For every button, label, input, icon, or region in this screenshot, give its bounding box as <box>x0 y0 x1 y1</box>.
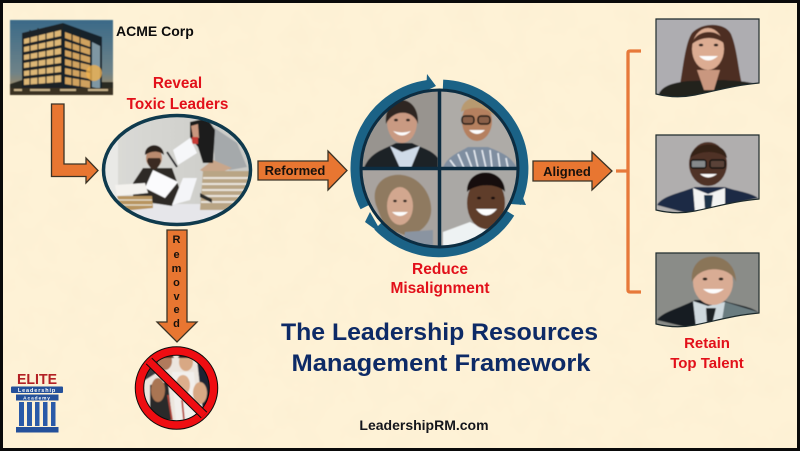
icon: prohibited toxic leaders <box>140 350 214 426</box>
photo: top talent man in suit <box>656 253 759 329</box>
woman <box>213 127 247 170</box>
ring arrows <box>356 74 526 252</box>
logo: ELITE Leadership Academy: Leadership <box>18 388 56 394</box>
arrow: Removed: e <box>173 304 180 316</box>
arrow: Removed: o <box>173 277 180 289</box>
label: Reveal Toxic Leaders: Reveal <box>153 75 202 92</box>
man bottom-right <box>442 222 486 246</box>
bracket <box>616 51 641 292</box>
photo: toxic leader oval <box>100 112 255 228</box>
arrow: Removed: m <box>172 263 182 275</box>
icon: ACME office building photo <box>10 20 113 95</box>
arrow: Reformed: Reformed <box>265 163 325 178</box>
left stack <box>115 183 148 196</box>
arrow: Aligned: Aligned <box>543 164 591 179</box>
logo: ELITE Leadership Academy <box>11 372 63 432</box>
label: Reduce Misalignment: Misalignment <box>390 280 490 297</box>
website: LeadershipRM.com <box>359 417 489 433</box>
right stack <box>200 171 250 210</box>
title: The Leadership Resources <box>281 319 598 346</box>
photo quadrants <box>360 88 521 250</box>
woman bottom-left <box>375 175 431 237</box>
photo: top talent man with glasses <box>656 135 759 215</box>
arrow: Reformed <box>258 151 347 190</box>
quadrant dividers <box>361 90 518 247</box>
arrow: Removed: v <box>173 291 180 303</box>
label: Retain Top Talent: Top Talent <box>670 355 744 372</box>
woman top-right <box>443 147 517 168</box>
arrow: Removed <box>157 230 197 342</box>
label: Retain Top Talent: Retain <box>684 335 730 352</box>
title: Management Framework <box>292 350 591 377</box>
label: ACME Corp: ACME Corp <box>116 23 194 39</box>
man <box>133 168 180 206</box>
man top-left <box>364 143 438 168</box>
arrow: building to toxic leaders <box>52 104 98 183</box>
label: Reveal Toxic Leaders: Toxic Leaders <box>127 96 228 113</box>
label: Reduce Misalignment: Reduce <box>412 261 468 278</box>
reduce misalignment circle <box>356 74 526 252</box>
arrow: Removed: e <box>173 249 180 261</box>
flying papers <box>173 138 197 165</box>
arrow: Aligned <box>533 152 612 190</box>
title <box>281 319 598 377</box>
logo: ELITE Leadership Academy: Academy <box>23 396 51 402</box>
arrow: Removed: d <box>173 318 180 330</box>
logo: ELITE Leadership Academy: ELITE <box>17 372 57 388</box>
photo: top talent woman <box>656 19 759 99</box>
arrow: Removed: R <box>173 234 181 246</box>
